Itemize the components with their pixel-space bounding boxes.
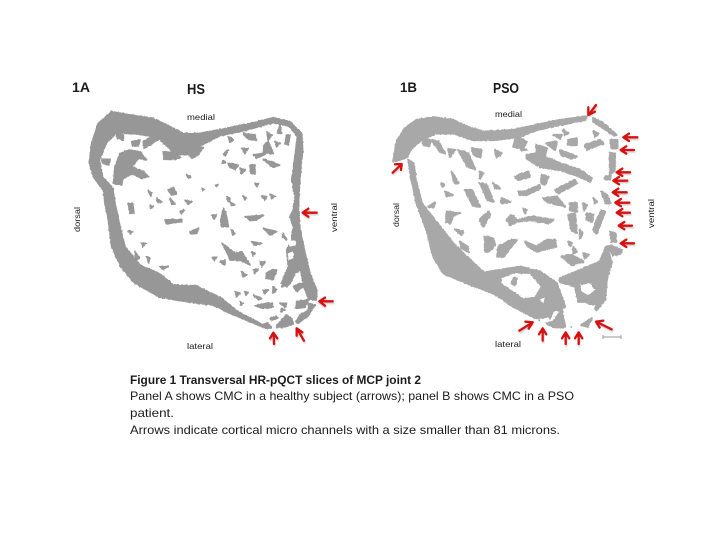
- panel label 1A: 1A: [72, 79, 90, 95]
- caption line 2: patient.: [130, 406, 174, 420]
- label lateral: lateral: [495, 339, 521, 349]
- label dorsal: dorsal: [391, 203, 401, 227]
- label medial: medial: [187, 112, 215, 122]
- red arrows B: [393, 105, 638, 346]
- label dorsal: dorsal: [72, 207, 82, 232]
- caption: [130, 373, 574, 437]
- red arrows A: [270, 209, 333, 346]
- caption heading: Figure 1 Transversal HR-pQCT slices of MCP joint 2: [130, 373, 421, 387]
- panel: 1A healthy subject: [72, 79, 339, 351]
- panel title PSO: PSO: [493, 81, 519, 97]
- panel label 1B: 1B: [400, 79, 417, 95]
- bone slice A: [89, 112, 317, 328]
- bone slice B: [393, 117, 622, 328]
- label medial: medial: [495, 109, 522, 119]
- caption line 3: Arrows indicate cortical micro channels with a size smaller than 81 microns.: [130, 423, 560, 437]
- scale bar: [603, 335, 621, 339]
- label lateral: lateral: [187, 341, 213, 351]
- label ventral: ventral: [329, 203, 339, 232]
- panel title HS: HS: [187, 82, 205, 98]
- panel: 1B PSO patient: [391, 79, 656, 349]
- caption line 1: Panel A shows CMC in a healthy subject (arrows); panel B shows CMC in a PSO: [130, 389, 574, 403]
- label ventral: ventral: [646, 199, 656, 228]
